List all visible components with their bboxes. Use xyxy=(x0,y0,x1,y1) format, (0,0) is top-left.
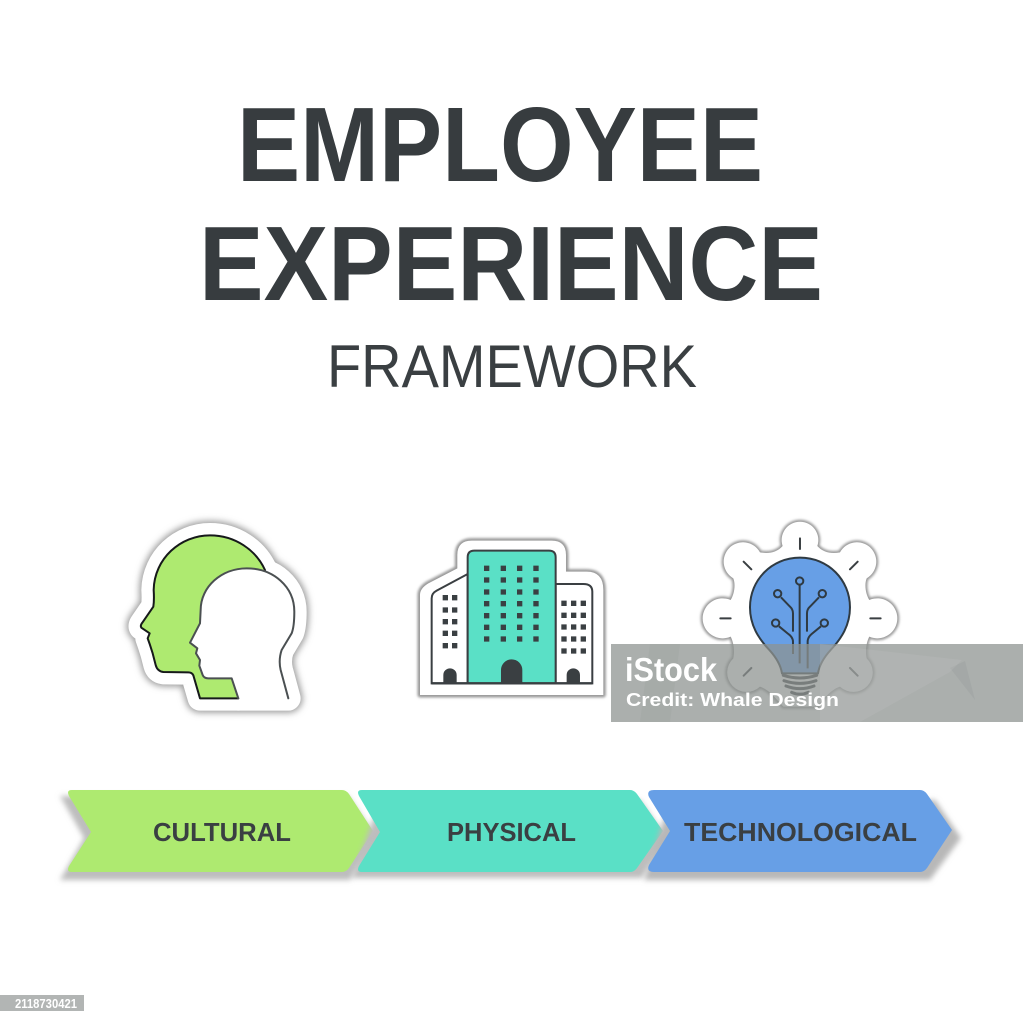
right building xyxy=(556,584,592,683)
icon: two human heads (cultural) xyxy=(141,535,294,698)
white head xyxy=(190,568,294,698)
title: EMPLOYEE xyxy=(237,86,763,204)
doors xyxy=(443,659,580,683)
icon: circuit light bulb (technological) xyxy=(703,522,897,707)
arrow: physical xyxy=(352,790,667,878)
left building xyxy=(432,574,468,683)
watermark band xyxy=(611,644,1023,722)
title xyxy=(199,86,823,323)
stock image id tag: 2118730421 xyxy=(15,997,77,1011)
label: technological: TECHNOLOGICAL xyxy=(684,817,917,847)
ground line xyxy=(432,680,592,687)
bulb base xyxy=(783,675,817,689)
title: EXPERIENCE xyxy=(199,205,823,323)
side windows xyxy=(443,595,586,654)
green head xyxy=(141,535,265,698)
arrow: technological xyxy=(644,790,961,880)
tower windows xyxy=(484,566,539,642)
watermark credit: Credit: Whale Design xyxy=(626,689,839,710)
white head outline xyxy=(190,568,294,698)
arrow: cultural xyxy=(60,790,377,880)
central tower xyxy=(468,551,556,683)
watermark logo: iStock xyxy=(625,651,718,688)
icon: office buildings (physical) xyxy=(420,541,603,695)
rays xyxy=(720,538,881,676)
bulb glass xyxy=(750,558,850,673)
subtitle: FRAMEWORK xyxy=(327,333,697,400)
label: cultural: CULTURAL xyxy=(153,817,291,847)
circuit traces xyxy=(772,577,828,668)
label: physical: PHYSICAL xyxy=(447,817,576,847)
